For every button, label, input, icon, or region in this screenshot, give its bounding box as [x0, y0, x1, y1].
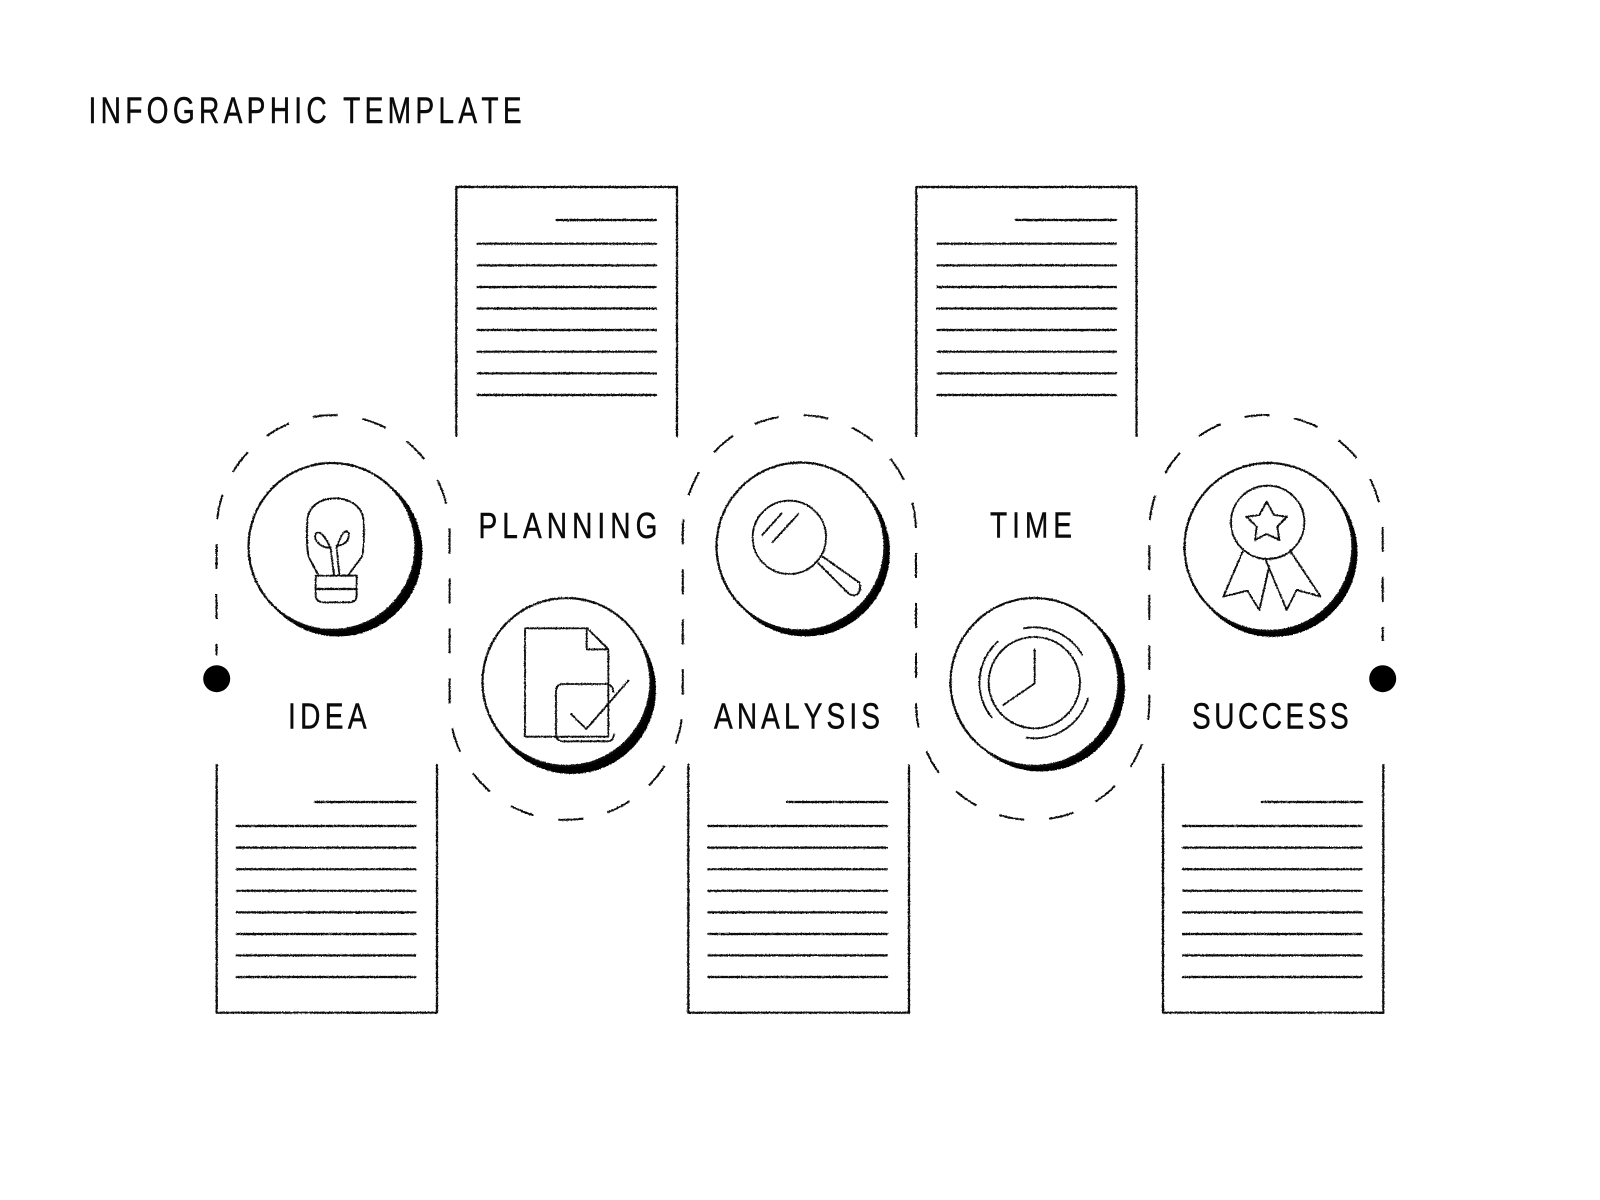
panel outline	[916, 187, 1136, 436]
label: idea: IDEA	[288, 696, 371, 736]
title: INFOGRAPHIC TEMPLATE	[88, 89, 526, 131]
icon: magnifying glass	[753, 501, 860, 595]
dashed connector path	[216, 415, 1383, 820]
icon: award ribbon	[1223, 486, 1321, 610]
label: analysis: ANALYSIS	[714, 696, 884, 736]
start dot	[203, 665, 230, 692]
badge: success	[1184, 463, 1358, 637]
panel: idea text box	[217, 765, 437, 1013]
badge: analysis	[716, 462, 890, 636]
label: success: SUCCESS	[1192, 696, 1352, 736]
panel: analysis text box	[688, 765, 909, 1013]
icon: document with checkmark	[525, 628, 628, 741]
panel outline	[1163, 765, 1383, 1013]
panel: planning text box	[456, 187, 677, 436]
panel: time text box	[916, 187, 1136, 436]
panel outline	[688, 765, 909, 1013]
badge: idea	[248, 463, 422, 636]
text lines	[708, 802, 887, 977]
panel: success text box	[1163, 765, 1383, 1013]
text lines	[938, 220, 1116, 395]
icon: light bulb	[307, 498, 364, 602]
label: time: TIME	[990, 505, 1077, 545]
badge: planning	[482, 598, 656, 774]
label: planning: PLANNING	[478, 506, 663, 546]
badge: time	[950, 598, 1125, 772]
icon: clock	[979, 627, 1088, 738]
text lines	[478, 220, 656, 395]
panel outline	[456, 187, 677, 436]
panel outline	[217, 765, 437, 1013]
text lines	[1183, 802, 1362, 977]
end dot	[1369, 665, 1396, 692]
text lines	[237, 802, 416, 977]
